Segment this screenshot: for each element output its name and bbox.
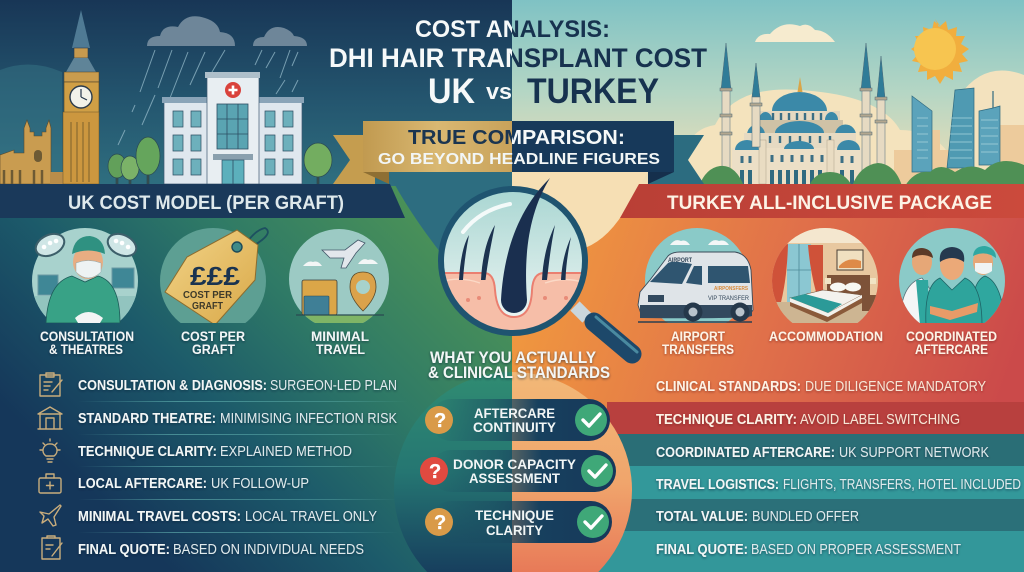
pill: donor capacity assessment xyxy=(420,450,616,492)
band: UK cost model heading: UK COST MODEL (PER GRAFT) xyxy=(68,193,344,214)
label: minimal travel: TRAVEL xyxy=(316,342,365,357)
row: consultation and diagnosis: SURGEON-LED PLAN xyxy=(270,378,397,394)
row: clinical standards: DUE DILIGENCE MANDATORY xyxy=(805,379,986,395)
icon: airplane xyxy=(40,505,61,526)
panel: centre circle xyxy=(394,372,632,572)
icon: green check xyxy=(581,455,613,487)
band: Turkey package heading xyxy=(620,184,1024,218)
row: consultation and diagnosis xyxy=(78,378,397,394)
icon: green check xyxy=(575,404,607,436)
heading: what you actually and clinical standards xyxy=(428,349,610,382)
icon: gold question mark xyxy=(425,508,453,536)
row: clinical standards xyxy=(656,379,986,395)
label: consultation and theatres: & THEATRES xyxy=(49,342,123,357)
label: airport transfers: AIRPORT xyxy=(671,329,726,344)
label: airport transfers xyxy=(662,329,734,357)
pill: aftercare continuity: AFTERCARE xyxy=(474,405,555,421)
ribbon: true comparison banner xyxy=(333,121,704,184)
illustration: Turkey trees xyxy=(699,161,1024,186)
funnel: centre UK wedge xyxy=(388,172,512,262)
label: cost per graft: COST PER xyxy=(181,329,245,344)
row: minimal travel costs xyxy=(78,509,377,525)
row: minimal travel costs: LOCAL TRAVEL ONLY xyxy=(245,509,377,525)
label: coordinated aftercare xyxy=(906,329,997,357)
icon: light bulb xyxy=(40,439,60,462)
icon: airport van: VIP TRANSFER xyxy=(708,296,750,302)
pill: aftercare continuity: CONTINUITY xyxy=(473,419,557,435)
title: UK xyxy=(428,72,475,111)
icon: first aid case xyxy=(39,474,61,493)
ribbon: true comparison banner: TRUE COMPARISON: xyxy=(408,127,625,149)
background: UK sky xyxy=(0,0,512,186)
illustration: skyscrapers xyxy=(912,88,1000,172)
icon: gold question mark xyxy=(425,406,453,434)
icon: theatre building xyxy=(38,407,62,429)
row: local aftercare xyxy=(78,476,309,492)
row: coordinated aftercare xyxy=(656,445,989,461)
row: travel logistics: TRAVEL LOGISTICS: xyxy=(656,477,779,493)
row: minimal travel costs: MINIMAL TRAVEL COSTS: xyxy=(78,509,241,525)
icon: gold question mark: ? xyxy=(434,512,446,534)
icon: red question mark xyxy=(420,457,448,485)
row: total value: BUNDLED OFFER xyxy=(752,509,859,525)
row: technique clarity: TECHNIQUE CLARITY: xyxy=(78,444,217,460)
row: standard theatre: STANDARD THEATRE: xyxy=(78,411,216,427)
row: total value: TOTAL VALUE: xyxy=(656,509,748,525)
list: UK dividers xyxy=(78,401,408,533)
background: Turkey lower panel xyxy=(512,186,1024,572)
label: airport transfers: TRANSFERS xyxy=(662,342,734,357)
row: final quote UK: BASED ON INDIVIDUAL NEEDS xyxy=(173,542,364,558)
illustration: Turkey backdrop clouds and city xyxy=(680,24,1024,184)
icon: red question mark: ? xyxy=(429,461,441,483)
label: minimal travel: MINIMAL xyxy=(311,329,369,344)
illustration: Blue Mosque xyxy=(720,43,887,184)
icon: surgeon in theatre xyxy=(32,228,138,323)
label: cost per graft xyxy=(181,329,245,357)
icon: magnifying lens with hair follicle xyxy=(436,178,590,340)
icon: Parliament xyxy=(0,120,64,184)
band: UK cost model heading xyxy=(0,184,405,218)
row: technique clarity Turkey: TECHNIQUE CLARITY: xyxy=(656,412,797,428)
illustration: rain clouds xyxy=(118,16,307,145)
icon: red cross xyxy=(225,82,241,98)
row: standard theatre xyxy=(78,411,397,427)
icon: hotel room xyxy=(772,228,878,323)
title xyxy=(329,16,707,111)
row: travel logistics xyxy=(656,477,1021,493)
label: coordinated aftercare: AFTERCARE xyxy=(915,342,988,357)
label: minimal travel xyxy=(311,329,369,357)
row: final quote UK xyxy=(78,542,364,558)
row: technique clarity: EXPLAINED METHOD xyxy=(220,444,352,460)
ribbon: true comparison banner: GO BEYOND HEADLINE FIGURES xyxy=(378,151,660,168)
icon: minarets xyxy=(720,43,887,184)
band: Turkey package heading: TURKEY ALL-INCLUSIVE PACKAGE xyxy=(667,193,992,214)
icon: clipboard with pen xyxy=(42,536,62,559)
row: coordinated aftercare: COORDINATED AFTERCARE: xyxy=(656,445,835,461)
row: consultation and diagnosis: CONSULTATION & DIAGNOSIS: xyxy=(78,378,267,394)
pill: technique clarity: TECHNIQUE xyxy=(475,507,554,523)
title: COST ANALYSIS: xyxy=(415,16,610,43)
icon: price tag xyxy=(160,228,268,334)
row: local aftercare: UK FOLLOW-UP xyxy=(211,476,309,492)
illustration: UK hospital xyxy=(162,72,304,184)
row: technique clarity xyxy=(78,444,352,460)
icon: airport van: AIRPONSFERS xyxy=(714,286,749,292)
label: consultation and theatres: CONSULTATION xyxy=(40,329,134,344)
title: TURKEY xyxy=(527,72,659,111)
row: technique clarity Turkey: AVOID LABEL SWITCHING xyxy=(800,412,960,428)
pill: donor capacity assessment: DONOR CAPACITY xyxy=(453,456,577,472)
pill: technique clarity: CLARITY xyxy=(486,522,544,538)
row: standard theatre: MINIMISING INFECTION RISK xyxy=(220,411,397,427)
label: cost per graft: GRAFT xyxy=(192,342,236,357)
heading: what you actually and clinical standards: & CLINICAL STANDARDS xyxy=(428,364,610,382)
pill: donor capacity assessment: ASSESSMENT xyxy=(469,470,560,486)
icon: sun xyxy=(911,19,969,84)
row: total value xyxy=(656,509,859,525)
label: coordinated aftercare: COORDINATED xyxy=(906,329,997,344)
pill: aftercare continuity xyxy=(425,399,610,441)
title: vs xyxy=(486,79,512,104)
icon: green check xyxy=(577,506,609,538)
row: final quote UK: FINAL QUOTE: xyxy=(78,542,170,558)
label: consultation and theatres xyxy=(40,329,134,357)
icon: price tag: GRAFT xyxy=(192,300,223,312)
heading: what you actually and clinical standards: WHAT YOU ACTUALLY xyxy=(430,349,596,367)
row: technique clarity Turkey xyxy=(656,412,960,428)
background: Turkey sky xyxy=(512,0,1024,186)
icon: price tag: £££ xyxy=(190,261,241,291)
icon: magnifying glass handle xyxy=(575,306,637,354)
icon: price tag: COST PER xyxy=(183,289,232,301)
icon: clinical team xyxy=(899,228,1005,323)
icon: gold question mark: ? xyxy=(434,410,446,432)
funnel: centre Turkey wedge xyxy=(512,172,648,262)
icon: Big Ben xyxy=(63,10,99,184)
illustration: trees xyxy=(108,137,332,184)
icon: airport van xyxy=(638,228,753,332)
row: final quote Turkey xyxy=(656,542,961,558)
icon: airport van: AIRPORT xyxy=(668,258,692,264)
background: UK lower panel xyxy=(0,186,512,572)
row: local aftercare: LOCAL AFTERCARE: xyxy=(78,476,207,492)
row: final quote Turkey: BASED ON PROPER ASSESSMENT xyxy=(751,542,961,558)
label: accommodation: ACCOMMODATION xyxy=(769,329,883,344)
row: final quote Turkey: FINAL QUOTE: xyxy=(656,542,748,558)
pill: technique clarity xyxy=(425,501,612,543)
row: coordinated aftercare: UK SUPPORT NETWORK xyxy=(839,445,989,461)
panel: Turkey rows backdrop xyxy=(590,402,1024,572)
title: DHI HAIR TRANSPLANT COST xyxy=(329,43,707,73)
icon: minimal travel xyxy=(289,229,389,329)
illustration: London skyline xyxy=(0,10,99,184)
row: clinical standards: CLINICAL STANDARDS: xyxy=(656,379,801,395)
icon: clipboard xyxy=(40,373,62,396)
